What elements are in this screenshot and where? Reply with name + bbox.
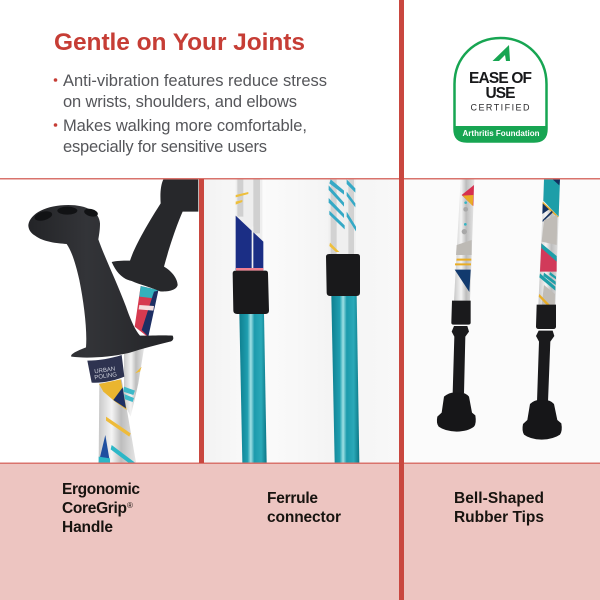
caption: ergonomic handle: Handle (62, 519, 113, 536)
text block: benefit bullets: Makes walking more comfortable, (63, 117, 307, 135)
icon: left pole with bell-shaped tip (437, 179, 476, 432)
icon: Ease of Use certified badge (454, 38, 546, 142)
icon: Ease of Use certified badge: EASE OF (469, 70, 532, 87)
panel: ergonomic handle photo (0, 179, 199, 463)
icon: grip finger holes (34, 207, 99, 222)
icon: right pole with ferrule (326, 179, 360, 463)
panel: caption band (0, 463, 600, 600)
icon: wrist strap collar: POLING (94, 372, 118, 381)
caption: ferrule connector: connector (267, 509, 341, 526)
caption: ferrule connector: Ferrule (267, 490, 318, 507)
caption: ergonomic handle: CoreGrip (62, 500, 127, 517)
icon: rear grip (112, 179, 198, 291)
caption: ergonomic handle: ® (127, 501, 133, 510)
heading: Gentle on Your Joints (54, 29, 305, 56)
icon: front grip (28, 205, 173, 358)
icon: Ease of Use certified badge: Arthritis Foundation (462, 129, 540, 138)
caption: bell-shaped rubber tips: Bell-Shaped (454, 490, 544, 507)
text block: benefit bullets (54, 72, 327, 156)
icon: front pole (99, 379, 136, 463)
icon: Ease of Use certified badge: USE (486, 85, 516, 102)
panel: ferrule connector photo (204, 179, 399, 463)
text block: benefit bullets: Anti-vibration features reduce stress (63, 72, 327, 90)
caption: bell-shaped rubber tips (454, 490, 544, 526)
caption: ergonomic handle: Ergonomic (62, 481, 140, 498)
icon: right pole with bell-shaped tip (523, 179, 562, 440)
icon: wrist strap collar (87, 355, 124, 383)
icon: left pole with ferrule (233, 179, 269, 463)
icon: wrist strap collar: URBAN (94, 366, 116, 375)
caption: bell-shaped rubber tips: Rubber Tips (454, 509, 544, 526)
icon: rear pole (123, 286, 158, 417)
text block: benefit bullets: especially for sensitive users (63, 138, 267, 156)
text block: benefit bullets: on wrists, shoulders, and elbows (63, 93, 297, 111)
caption: ergonomic handle (62, 481, 140, 536)
icon: Ease of Use certified badge: CERTIFIED (470, 102, 530, 112)
panel: rubber tips photo (404, 179, 600, 463)
caption: ferrule connector (267, 490, 341, 526)
